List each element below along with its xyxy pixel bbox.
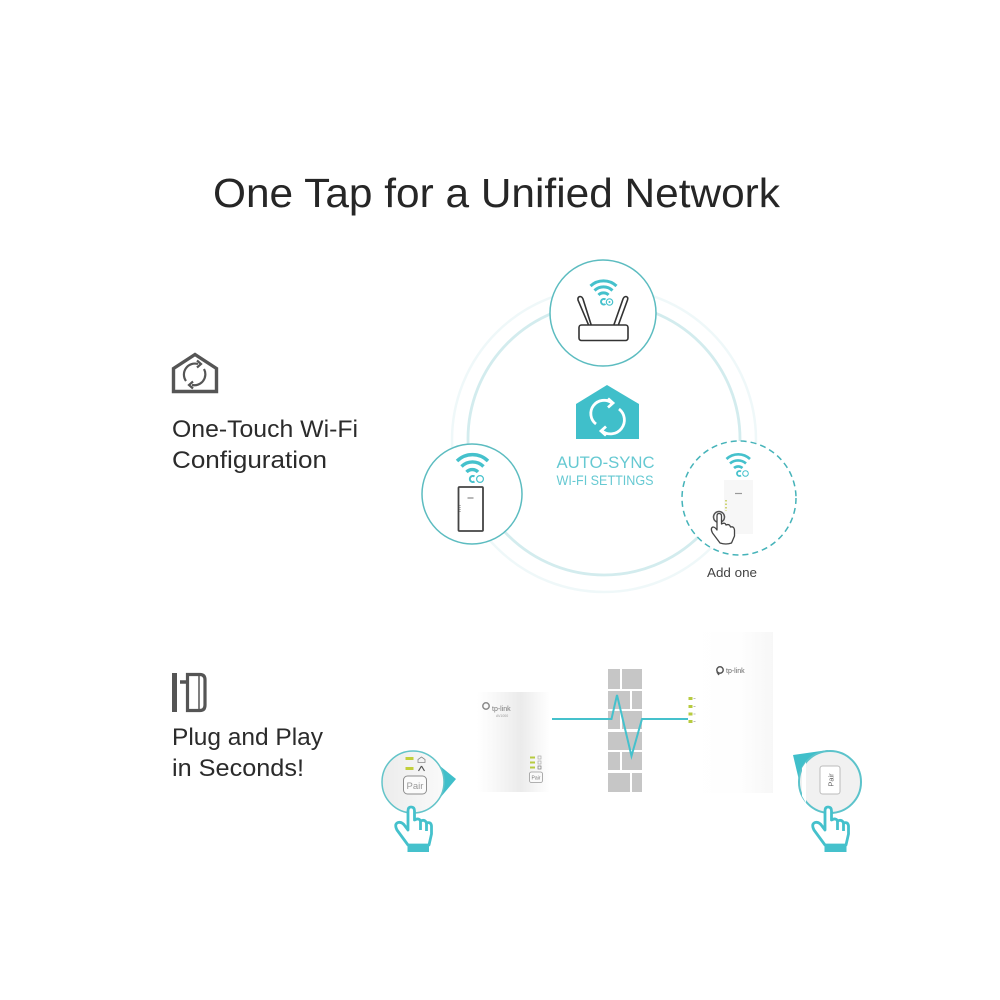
heading: one-touch configuration: Configuration [172, 447, 327, 474]
button: right pair: Pair [826, 773, 836, 787]
heading: one-touch configuration [172, 416, 358, 474]
panel: extender circle [422, 444, 522, 544]
icon: right hand [813, 807, 848, 852]
logo: small adapter: AV1000 [496, 714, 508, 718]
center label: auto-sync [556, 454, 655, 488]
signal line [552, 695, 688, 756]
icon: plug [172, 673, 205, 712]
callout: left pair button [382, 751, 456, 813]
button: left pair: Pair [407, 781, 423, 792]
logo: large extender: tp-link [726, 668, 745, 675]
heading: one-touch configuration: One-Touch Wi-Fi [172, 416, 358, 443]
diagram rings [452, 288, 756, 592]
heading: plug and play: Plug and Play [172, 724, 323, 751]
indicators: small adapter [530, 756, 541, 769]
icon: extender wifi [457, 455, 488, 482]
label: add one: Add one [707, 565, 757, 580]
device: small powerline adapter [477, 692, 550, 792]
center label: auto-sync: WI-FI SETTINGS [556, 473, 654, 488]
device: large extender [688, 632, 773, 793]
logo: large extender [717, 667, 745, 675]
icon: add wifi [726, 454, 750, 476]
logo: small adapter: tp-link [492, 706, 511, 713]
icon: router wifi [590, 281, 616, 305]
icon: extender outline [458, 487, 483, 531]
center house icon [576, 385, 639, 439]
icon: left hand [396, 807, 432, 852]
device edge strip [802, 762, 806, 803]
heading: plug and play [172, 724, 323, 782]
panel: router circle [550, 260, 656, 366]
icon: house with sync arrows [174, 354, 216, 392]
callout: right pair button [793, 750, 861, 813]
wall [608, 669, 642, 792]
panel: add one dashed circle [682, 441, 796, 555]
logo: small adapter [483, 703, 511, 718]
indicators: large extender [688, 697, 696, 723]
device: new extender [724, 480, 753, 534]
indicators: left callout [406, 757, 425, 771]
icon: pointer hand [711, 512, 734, 544]
button: small pair: Pair [532, 776, 541, 782]
icon: router [578, 296, 628, 340]
heading: plug and play: in Seconds! [172, 755, 304, 782]
center label: auto-sync: AUTO-SYNC [556, 454, 655, 472]
title: One Tap for a Unified Network [213, 170, 781, 216]
